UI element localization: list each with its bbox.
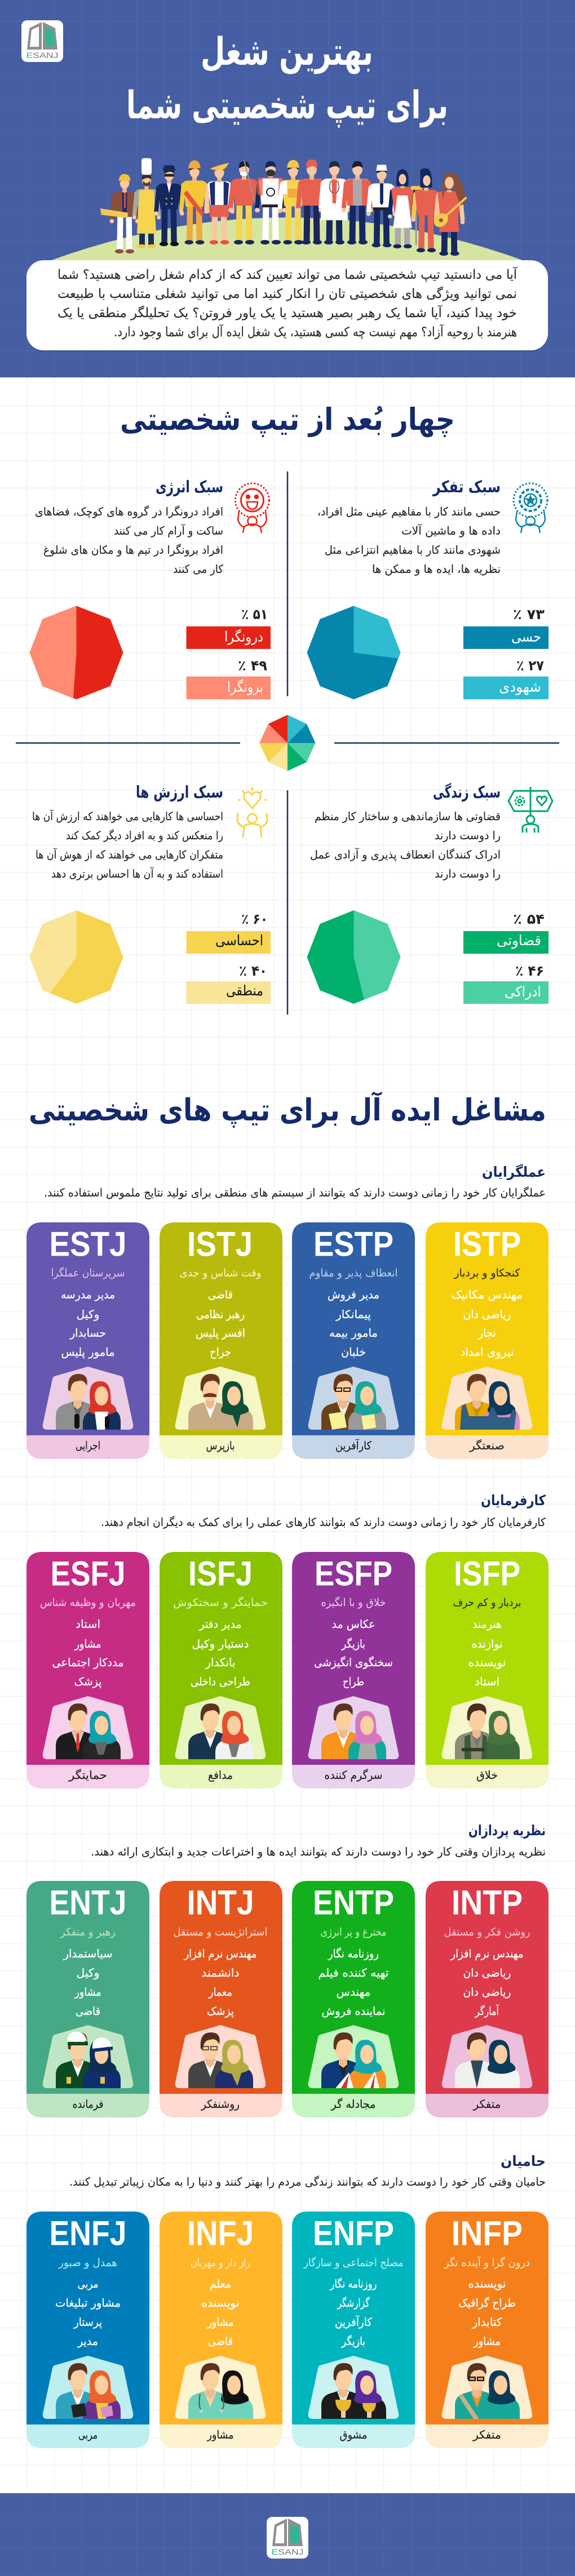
pie chart 51/49 — [29, 606, 123, 700]
card: ISTJ: افسر پلیس — [196, 1326, 245, 1340]
card: INTP: ریاضی دان — [463, 1966, 511, 1979]
illustration: defender couple — [175, 1696, 266, 1759]
card: ENFJ: همدل و صبور — [58, 2257, 117, 2269]
stat: judging: ۵۴ ٪ — [513, 911, 545, 927]
card: INFP: INFP — [452, 2214, 523, 2252]
center octagon — [259, 715, 316, 771]
card: INFP: مشاور — [473, 2334, 501, 2348]
header background — [0, 0, 575, 377]
stat: extrovert — [186, 657, 271, 700]
figure: man with pole — [228, 161, 260, 244]
figure: architect — [100, 174, 139, 253]
stat: judging — [463, 911, 549, 954]
stat: sensing: ۷۳ ٪ — [513, 606, 545, 622]
illustration: mastermind couple — [175, 2025, 266, 2088]
group description: pragmatists: عملگرایان کار خود را زمانی دوست دارند که بتوانند از سیستم های منطقی برای تولید نتایج ملموس استفاده کنند. — [44, 1186, 546, 1199]
card: ISFP: استاد — [475, 1675, 499, 1688]
card: ISTP: کنجکاو و بردبار — [454, 1267, 520, 1279]
panel: values style — [29, 782, 271, 1004]
card: ENFP: ENFP — [313, 2214, 394, 2252]
card: ISTJ: وقت شناس و جدی — [179, 1267, 262, 1279]
icon: signpost — [508, 787, 552, 833]
card: ENTJ: ENTJ — [50, 1884, 126, 1922]
card: INTJ: دانشمند — [202, 1966, 239, 1979]
card: ISTJ: بازپرس — [206, 1439, 235, 1453]
card: INTP: INTP — [452, 1884, 523, 1922]
card: INFP: متفکر — [472, 2428, 501, 2441]
description: کار می کنند — [173, 562, 223, 576]
intro text panel — [26, 260, 548, 352]
card: INTP: روشن فکر و مستقل — [444, 1926, 530, 1938]
figure: man in red shirt — [296, 159, 328, 244]
card: INTP: آمارگر — [475, 2004, 499, 2018]
card: ESTJ: اجرایی — [76, 1439, 100, 1452]
card: ENTP — [292, 1881, 415, 2117]
card: ISFP: ISFP — [454, 1555, 520, 1593]
pie chart 73/27 — [307, 606, 400, 700]
card: ESTP: ESTP — [313, 1225, 393, 1263]
description: ادراک کنندگان انعطاف پذیری و آزادی عمل — [310, 847, 501, 862]
card: INFP: درون گرا و آینده نگر — [444, 2255, 530, 2269]
stat: judging: قضاوتی — [497, 932, 541, 949]
card: ISFJ: حمایتگر و سختکوش — [173, 1596, 268, 1609]
card: ESFP: ESFP — [315, 1555, 392, 1593]
card: INFP: نویسنده — [468, 2277, 506, 2290]
description — [310, 809, 501, 880]
card: ENTP: مخترع و پر انرژی — [320, 1926, 387, 1938]
card: ISFJ: دستیار وکیل — [192, 1637, 249, 1650]
card: ISTP: صنعتگر — [469, 1439, 505, 1452]
card: ENTP: نماینده فروش — [321, 2004, 386, 2018]
figure: man in red jacket — [342, 161, 373, 244]
card: ESTP: کارآفرین — [335, 1438, 371, 1452]
card: INFJ: مشاور — [207, 2315, 233, 2329]
card: ESTJ: ESTJ — [50, 1225, 126, 1263]
icon: heart with hands — [237, 787, 267, 838]
card: ESFJ: استاد — [76, 1617, 100, 1631]
description: شهودی مانند کار با مفاهیم انتزاعی مثل — [325, 543, 501, 557]
heading: سبک زندگی — [433, 782, 501, 802]
card: INFP — [426, 2212, 549, 2448]
card: ESFJ: مشاور — [74, 1637, 101, 1650]
card: ENFP: بازیگر — [341, 2334, 365, 2348]
card: ESTP — [292, 1222, 415, 1459]
card: ESTJ: سرپرستان عملگرا — [51, 1266, 125, 1279]
stat: thinking: ۴۰ ٪ — [239, 963, 267, 979]
card: ISFJ: طراحی داخلی — [191, 1675, 250, 1688]
card: INFJ: قاضی — [208, 2334, 233, 2348]
card: ISFP — [426, 1552, 549, 1788]
group description: idealists: حامیان وقتی کار خود را دوست دارند که بتوانند زندگی مردم را بهتر کنند و دنیا را به مکان زیباتر تبدیل کنند. — [69, 2175, 546, 2188]
group heading: employers: کارفرمایان — [481, 1492, 546, 1509]
card: ESFJ: حمایتگر — [68, 1768, 107, 1782]
stat: introvert: درونگرا — [224, 629, 263, 646]
illustration: teacher couple — [43, 2356, 133, 2419]
card: ENTJ: رهبر و متفکر — [60, 1926, 116, 1938]
card: ISFJ — [160, 1552, 282, 1788]
card: ISFJ: مدیر دفتر — [199, 1617, 241, 1631]
card: ENFP: مشوق — [339, 2428, 368, 2441]
card: ISTJ: ISTJ — [187, 1225, 253, 1263]
figure: police officer — [366, 164, 397, 247]
main title: برای تیپ شخصیتی شما — [126, 83, 448, 128]
illustration: craftsman couple — [442, 1367, 532, 1430]
illustration: entertainer couple — [308, 1696, 399, 1759]
card: INFJ: راز دار و مهربان — [191, 2257, 250, 2269]
card: ENTP: تهیه کننده فیلم — [318, 1966, 389, 1979]
card: ESFP: سخنگوی انگیزشی — [314, 1656, 393, 1669]
card: ESFJ: ESFJ — [51, 1555, 125, 1593]
illustration: inspector couple — [175, 1367, 266, 1430]
card: ESTJ: مامور پلیس — [61, 1345, 115, 1359]
divider lines — [16, 471, 559, 1015]
card: ENFJ: پرستار — [73, 2315, 102, 2329]
card: ISTJ: قاضی — [208, 1288, 233, 1301]
illustration: thinker couple — [442, 2356, 532, 2419]
illustration: thinker couple — [442, 2025, 532, 2088]
card: ENTJ: مشاور — [74, 1985, 101, 1999]
card: ISFJ: ISFJ — [188, 1555, 253, 1593]
card: ESFJ: پزشک — [74, 1675, 101, 1689]
stat: feeling: ۶۰ ٪ — [241, 911, 268, 927]
icon: smiley with hands — [236, 483, 269, 533]
heading: سبک ارزش ها — [136, 782, 223, 802]
stat: introvert: ۵۱ ٪ — [241, 606, 268, 622]
card: INFP: طراح گرافیک — [458, 2296, 516, 2310]
card: INFJ: معلم — [210, 2277, 231, 2290]
stat: sensing — [463, 606, 549, 649]
figure: hazmat worker — [255, 161, 286, 244]
card: INFJ: نویسنده — [202, 2296, 239, 2310]
hill — [51, 217, 523, 260]
section heading: four dimensions: چهار بُعد از تیپ شخصیتی — [120, 402, 455, 437]
card: ENTJ: وکیل — [77, 1966, 99, 1979]
card: ENFP: کارآفرین — [335, 2315, 372, 2329]
card: INTJ — [160, 1881, 282, 2117]
logo: header — [21, 20, 63, 62]
card: INTP — [426, 1881, 549, 2117]
card: INFJ: مشاور — [207, 2428, 233, 2441]
logo: header: ESANJ — [26, 51, 59, 60]
card: INTJ: معمار — [208, 1985, 232, 1999]
card: ESTJ: حسابدار — [69, 1326, 106, 1340]
card: INTJ: مهندس نرم افزار — [184, 1947, 256, 1960]
card: ENTJ: قاضی — [76, 2004, 100, 2018]
card: ISFP: خلاق — [476, 1768, 498, 1782]
group heading: idealists: حامیان — [501, 2153, 546, 2169]
main title: بهترین شغل — [201, 30, 373, 74]
heading: سبک انرژی — [156, 477, 223, 496]
card: ESTP: خلبان — [341, 1345, 366, 1359]
card: INTJ: پزشک — [207, 2004, 234, 2018]
card: ENFJ: ENFJ — [50, 2214, 126, 2252]
description: داده ها و ماشین آلات — [401, 523, 501, 537]
card: ISTP: مهندس مکانیک — [452, 1288, 523, 1301]
description: حسی مانند کار با مفاهیم عینی مثل افراد، — [317, 505, 501, 518]
card: INTJ: استراتژیست و مستقل — [174, 1926, 267, 1938]
description: افراد درونگرا در گروه های کوچک، فضاهای — [35, 505, 223, 518]
description: را منعکس کند و به افراد دیگر کمک کند — [66, 829, 223, 842]
card: ESTJ: مدیر مدرسه — [61, 1288, 115, 1301]
panel: lifestyle — [307, 782, 552, 1004]
figure: worker in yellow overalls — [278, 160, 308, 244]
card: ESTP: انعطاف پذیر و مقاوم — [309, 1267, 398, 1279]
card: ISFP: نویسنده — [468, 1656, 506, 1669]
group description: theorists: نظریه پردازان وقتی کار خود را دوست دارند که بتوانند ایده ها و اختراعات جدید و ابتکاری ارائه دهند. — [91, 1845, 546, 1859]
card: ESFP: طراح — [343, 1675, 364, 1688]
card: ENTP: ENTP — [313, 1884, 394, 1922]
footer background — [0, 2493, 575, 2576]
card: ENFJ: مربی — [78, 2277, 98, 2290]
group heading: pragmatists: عملگرایان — [482, 1164, 546, 1181]
illustration: supporter couple — [43, 1696, 133, 1759]
card: ENFJ — [26, 2212, 149, 2448]
stat: intuition — [463, 657, 549, 700]
card: ENFP: روزنامه نگار — [330, 2277, 377, 2290]
card: ESTP: مدیر فروش — [328, 1288, 379, 1301]
card: INTP: ریاضی دان — [463, 1985, 511, 1999]
stat: introvert — [186, 606, 271, 649]
figure: guitarist — [431, 172, 471, 256]
figure: woman in red overalls — [411, 168, 441, 252]
card: ENFJ: مشاور تبلیغات — [55, 2296, 121, 2310]
card: ENFJ: مدیر — [77, 2334, 98, 2348]
stat: perceiving: ادراکی — [505, 984, 541, 1000]
card: ESFP: خلاق و با انگیزه — [321, 1596, 386, 1609]
card: ESTJ: وکیل — [77, 1307, 99, 1321]
card: ISFJ: مدافع — [208, 1768, 233, 1782]
card: ISFJ: بانکدار — [205, 1656, 236, 1669]
card: ISFP: بردبار و کم حرف — [453, 1596, 521, 1609]
card: ENFP: گزارشگر — [337, 2296, 370, 2310]
figure: firefighter — [179, 161, 210, 244]
stat: perceiving: ۴۶ ٪ — [515, 963, 544, 979]
card: ISFP: نوازنده — [471, 1637, 503, 1650]
figure: doctor — [319, 161, 350, 244]
description — [32, 809, 223, 880]
stat: feeling: احساسی — [215, 932, 263, 949]
stat: extrovert: ۴۹ ٪ — [238, 657, 267, 674]
card: ESFJ — [26, 1552, 149, 1788]
stat: extrovert: برونگرا — [227, 679, 263, 696]
illustration: executive couple — [43, 1367, 133, 1430]
card: ISTP: ISTP — [453, 1225, 521, 1263]
description — [35, 505, 223, 576]
pie chart 54/46 — [307, 910, 400, 1004]
card: ISTJ: جراح — [210, 1345, 231, 1359]
description: احساسی ها کارهایی می خواهند که ارزش آن ها — [32, 809, 223, 823]
card: INTJ: INTJ — [187, 1884, 254, 1922]
description: افراد برونگرا در تیم ها و مکان های شلوغ — [43, 543, 223, 557]
card: ENFP — [292, 2212, 415, 2448]
card: ENTP: مهندس — [336, 1985, 371, 1999]
illustration: creative couple — [442, 1696, 532, 1759]
card: INFP: کتابدار — [471, 2315, 502, 2329]
figure: woman with paint roller — [388, 169, 422, 248]
card: INTP: مهندس نرم افزار — [450, 1947, 523, 1960]
description: را دوست دارند — [435, 867, 501, 880]
stat: intuition: ۲۷ ٪ — [516, 657, 544, 674]
card: ENFJ: مربی — [78, 2428, 98, 2441]
stat: feeling — [186, 911, 271, 954]
logo: footer: ESANJ — [272, 2547, 303, 2556]
description: قضاوتی ها سازماندهی و ساختار کار منظم — [315, 809, 501, 823]
icon: gear with hands — [514, 483, 547, 533]
card: INTP: متفکر — [472, 2097, 501, 2111]
panel: thinking style — [307, 477, 549, 700]
panel: energy style — [29, 477, 271, 700]
card: ESFJ: مددکار اجتماعی — [52, 1656, 124, 1669]
description: متفکران کارهایی می خواهند که از هوش آن ها — [36, 847, 223, 861]
card: ISTP: نیروی امداد — [460, 1345, 514, 1359]
card: ISTJ — [160, 1222, 282, 1459]
card: ESFP: بازیگر — [341, 1637, 365, 1650]
intro text panel: خود پیدا کنید، آیا شما یک رهبر بصیر هستید یا یک یاور فروتن؟ یک تحلیلگر منطقی یا یک — [58, 305, 517, 321]
figure: woman with sun hat — [204, 163, 235, 244]
illustration: counselor couple — [175, 2356, 266, 2419]
illustration: motivator couple — [308, 2356, 399, 2419]
heading: سبک تفکر — [432, 477, 501, 496]
logo: footer — [267, 2517, 308, 2559]
card: ESFP: سرگرم کننده — [325, 1768, 382, 1782]
description: را دوست دارند — [435, 829, 501, 842]
group description: employers: کارفرمایان کار خود را زمانی دوست دارند که بتوانند کارهای عملی را برای کمک به دیگران انجام دهند. — [101, 1515, 546, 1529]
card: ENTP: روزنامه نگار — [328, 1947, 379, 1960]
illustration: debater couple — [308, 2025, 399, 2088]
card: INFJ: INFJ — [187, 2214, 254, 2252]
card: ESFJ: مهربان و وظیفه شناس — [40, 1596, 136, 1609]
illustration: entrepreneur couple — [308, 1367, 399, 1430]
card: ENTJ: فرمانده — [72, 2097, 104, 2111]
card: ESTP: مامور بیمه — [329, 1326, 378, 1340]
pie chart 60/40 — [29, 910, 123, 1004]
intro text panel: نمی توانید ویژگی های شخصیتی تان را انکار کنید اما می توانید شغلی متناسب با طبیعت — [58, 286, 517, 301]
card: ESFP: عکاس مد — [331, 1617, 375, 1631]
illustration: commander couple — [43, 2025, 133, 2088]
stat: thinking — [186, 963, 271, 1004]
main title — [126, 30, 448, 128]
card: ESTP: پیمانکار — [335, 1307, 371, 1322]
card: ESFP — [292, 1552, 415, 1788]
stat: sensing: حسی — [511, 629, 541, 645]
card: ENTJ: سیاستمدار — [63, 1947, 113, 1960]
card: ENTJ — [26, 1881, 149, 2117]
card: ISTP: ریاضی دان — [463, 1307, 511, 1321]
card: ENFP: مصلح اجتماعی و سازگار — [303, 2256, 404, 2269]
card: INFJ — [160, 2212, 282, 2448]
stat: intuition: شهودی — [499, 679, 541, 696]
description: استفاده کند و به آن ها احساس برتری دهد — [51, 866, 223, 880]
card: ISTP: نجار — [477, 1326, 496, 1340]
stat: thinking: منطقی — [226, 982, 263, 999]
figure: pilot — [154, 166, 184, 246]
description: ساکت و آرام کار می کنند — [114, 523, 223, 537]
intro text panel: آیا می دانستید تیپ شخصیتی شما می تواند تعیین کند که از کدام شغل راضی هستید؟ شما — [58, 266, 518, 282]
people illustration — [100, 158, 471, 256]
card: ISTJ: رهبر نظامی — [196, 1307, 245, 1321]
card: INTJ: روشنفکر — [201, 2097, 240, 2111]
description — [317, 505, 501, 576]
card: ENTP: مجادله گر — [331, 2097, 375, 2111]
card: ESTJ — [26, 1222, 149, 1459]
card: ISFP: هنرمند — [472, 1617, 502, 1631]
stat: perceiving — [463, 963, 549, 1004]
figure: chef — [132, 158, 161, 248]
card: ISTP — [426, 1222, 549, 1459]
description: نظریه ها، ایده ها و ممکن ها — [372, 562, 501, 576]
group heading: theorists: نظریه پردازان — [468, 1822, 546, 1839]
